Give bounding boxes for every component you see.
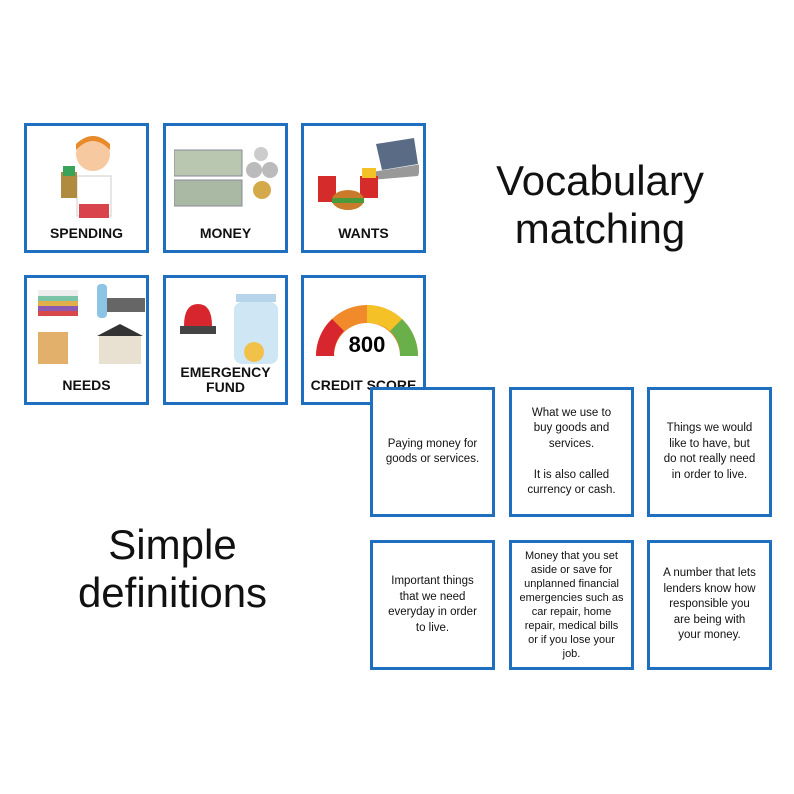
label: FUND bbox=[206, 379, 245, 395]
definition: spending: Paying money for goods or services. bbox=[386, 438, 479, 465]
title: simple definitions: Simple bbox=[108, 521, 237, 568]
title: vocabulary matching: matching bbox=[515, 205, 685, 252]
card: money bbox=[163, 123, 288, 253]
definition: needs: Important things that we need everyday in order to live. bbox=[388, 575, 477, 634]
icon: food and laptop bbox=[318, 138, 419, 210]
label: CREDIT SCORE bbox=[311, 377, 416, 393]
label: MONEY bbox=[200, 225, 251, 241]
card: emergency fund bbox=[163, 275, 288, 405]
definition: spending bbox=[370, 387, 495, 517]
definition: money: It is also called currency or cash. bbox=[527, 468, 616, 496]
definition: credit score bbox=[647, 540, 772, 670]
icon: siren and jar bbox=[180, 294, 278, 364]
definition: money bbox=[509, 387, 634, 517]
card: needs bbox=[24, 275, 149, 405]
card: spending bbox=[24, 123, 149, 253]
icon: gauge 800: 800 bbox=[349, 332, 385, 357]
icon: gauge 800 bbox=[316, 305, 418, 357]
label: WANTS bbox=[338, 225, 389, 241]
definition: emergency fund: Money that you set aside or save for unplanned financial emergencies such as car repair, home repair, medical bills or if you lose your job. bbox=[520, 550, 623, 660]
label: NEEDS bbox=[62, 377, 111, 393]
title: vocabulary matching bbox=[496, 157, 704, 252]
label bbox=[180, 364, 271, 395]
icon: bills and coins bbox=[174, 147, 278, 206]
icon: boy with money bbox=[61, 136, 112, 218]
definition: wants: Things we would like to have, but do not really need in order to live. bbox=[664, 422, 755, 480]
title: simple definitions: definitions bbox=[78, 569, 267, 616]
card: credit score bbox=[301, 275, 426, 405]
definition: needs bbox=[370, 540, 495, 670]
label: SPENDING bbox=[50, 225, 123, 241]
definition: money: What we use to buy goods and services. bbox=[532, 406, 611, 450]
title: vocabulary matching: Vocabulary bbox=[496, 157, 704, 204]
definition: wants bbox=[647, 387, 772, 517]
icon: clothes, water, groceries, house bbox=[38, 284, 145, 364]
title: simple definitions bbox=[78, 521, 267, 616]
definition: credit score: A number that lets lenders know how responsible you are being with your money. bbox=[663, 567, 756, 641]
label: EMERGENCY bbox=[180, 364, 271, 380]
card: wants bbox=[301, 123, 426, 253]
